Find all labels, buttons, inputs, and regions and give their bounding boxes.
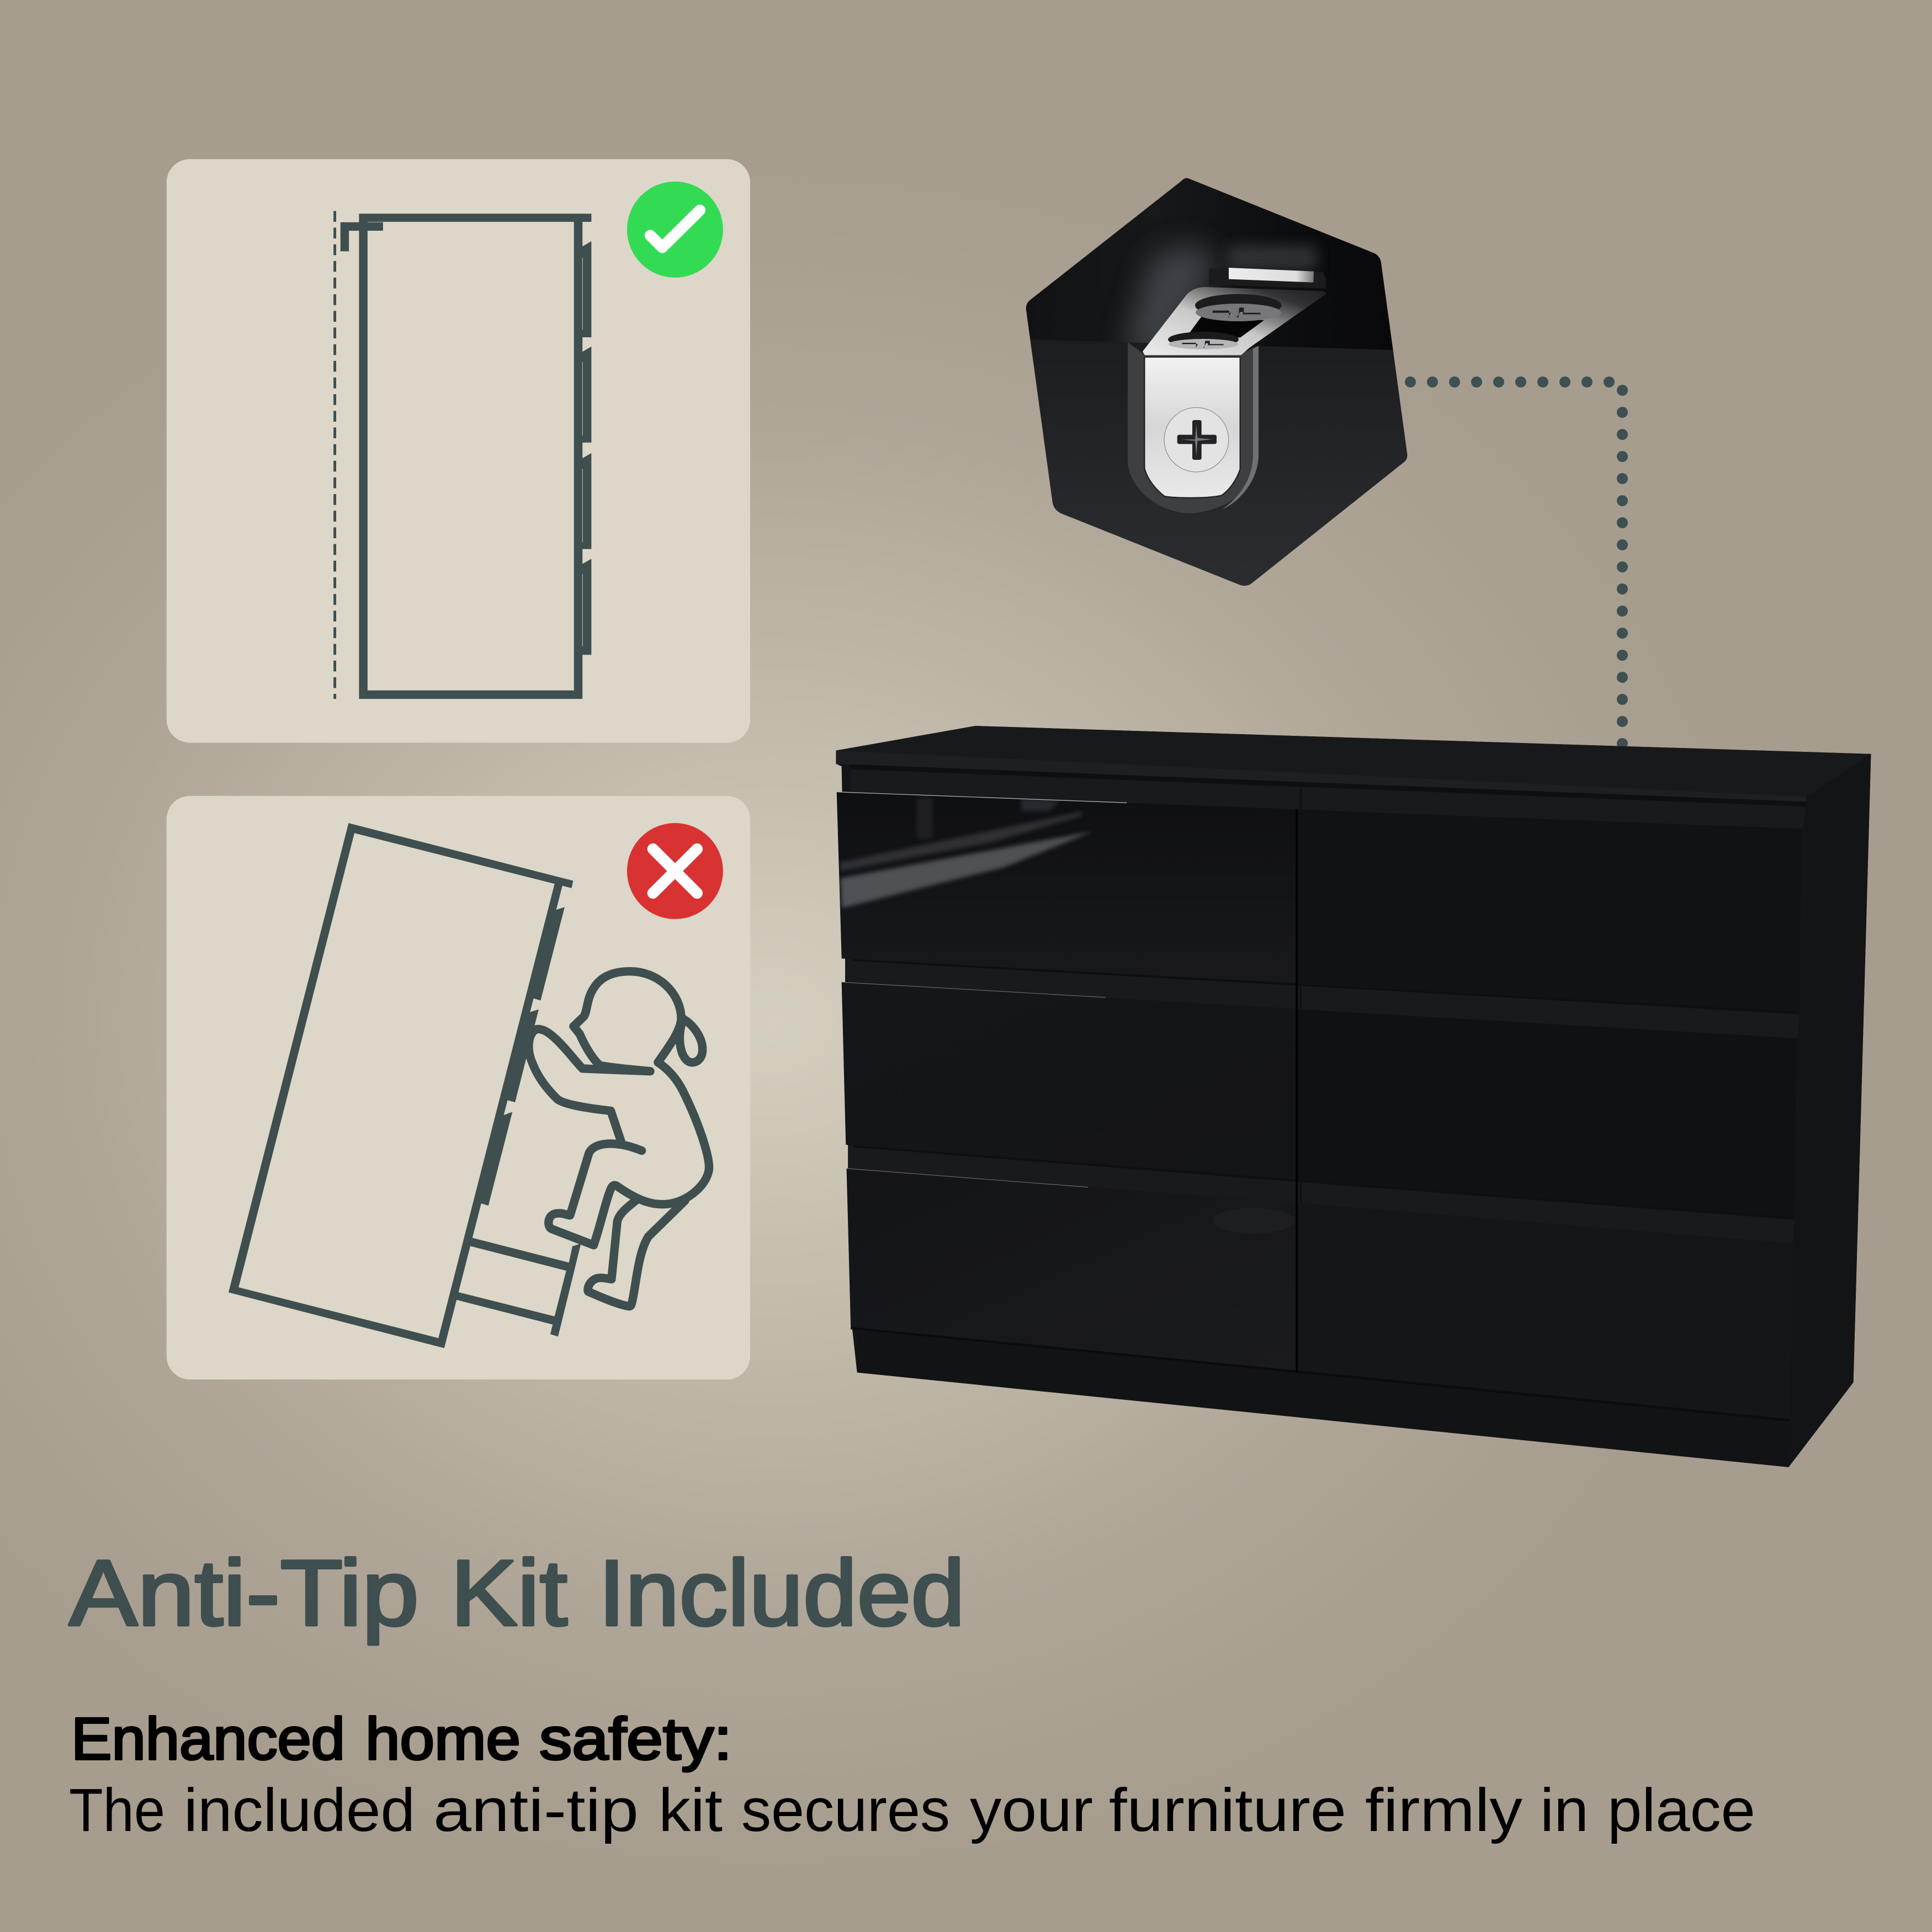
- description: The: [69, 1776, 165, 1844]
- description: place: [1607, 1776, 1755, 1844]
- hexagon detail: metal anti-tip bracket: [1021, 174, 1413, 591]
- slot opening: [1188, 316, 1264, 338]
- description: in: [1540, 1776, 1589, 1844]
- right side panel shade: [1788, 754, 1871, 1467]
- bracket flat plate: [1144, 357, 1240, 498]
- title: Kit: [450, 1541, 567, 1645]
- centre gap: [1296, 809, 1298, 1372]
- bracket angled arm: [1143, 287, 1326, 355]
- panel: incorrect installation, child climbing tipping cabinet: [167, 796, 750, 1379]
- dotted connector from bracket to dresser: [1405, 376, 1628, 749]
- description: secures: [741, 1776, 950, 1844]
- description: firmly: [1365, 1776, 1522, 1844]
- description: kit: [659, 1776, 723, 1844]
- rail below top: [851, 766, 1806, 829]
- top front edge: [836, 751, 1806, 804]
- child figure line drawing: [529, 972, 709, 1307]
- flange highlight: [1229, 268, 1314, 283]
- subheading: safety:: [539, 1705, 732, 1772]
- subheading: home: [365, 1705, 521, 1772]
- description: anti-tip: [433, 1776, 639, 1844]
- drawer front: middle left: [842, 982, 1296, 1179]
- plinth: [857, 1331, 1790, 1467]
- black six-drawer dresser: [836, 726, 1871, 1467]
- subheading: Enhanced: [71, 1705, 345, 1772]
- description: included: [184, 1776, 415, 1844]
- anti-tip bracket symbol: [341, 222, 383, 251]
- cabinet side view outline: [359, 214, 591, 699]
- title: Anti-Tip: [69, 1541, 419, 1645]
- drawer rails: [845, 958, 1799, 1038]
- description: furniture: [1109, 1776, 1346, 1844]
- plinth shadow line: [851, 1328, 1790, 1420]
- rim highlight: [1222, 346, 1259, 509]
- lower screw head: [1168, 332, 1239, 349]
- dresser body silhouette: [836, 726, 1871, 1467]
- drawer front: top left, with glossy reflection: [837, 792, 1296, 983]
- drawer front: bottom left: [847, 1169, 1296, 1372]
- rail shadow lines: [851, 767, 1806, 1218]
- drawer front: bottom right: [1298, 1203, 1793, 1420]
- panel: correct installation, anchored cabinet: [167, 159, 750, 742]
- drawer front: top right: [1298, 810, 1803, 1012]
- top surface: [836, 726, 1871, 797]
- description: your: [970, 1776, 1093, 1844]
- bracket recess rim: [1128, 342, 1259, 513]
- upper screw head: [1195, 294, 1282, 321]
- bracket top flange: [1209, 268, 1326, 289]
- drawer front: middle right: [1298, 1009, 1798, 1217]
- icon: red cross badge: [627, 823, 723, 919]
- tipping cabinet outline: [229, 823, 581, 1348]
- main screw with cross recess: [1164, 407, 1229, 472]
- title: Included: [598, 1541, 965, 1645]
- icon: green check badge: [627, 182, 723, 278]
- wall dashed line: [333, 211, 337, 699]
